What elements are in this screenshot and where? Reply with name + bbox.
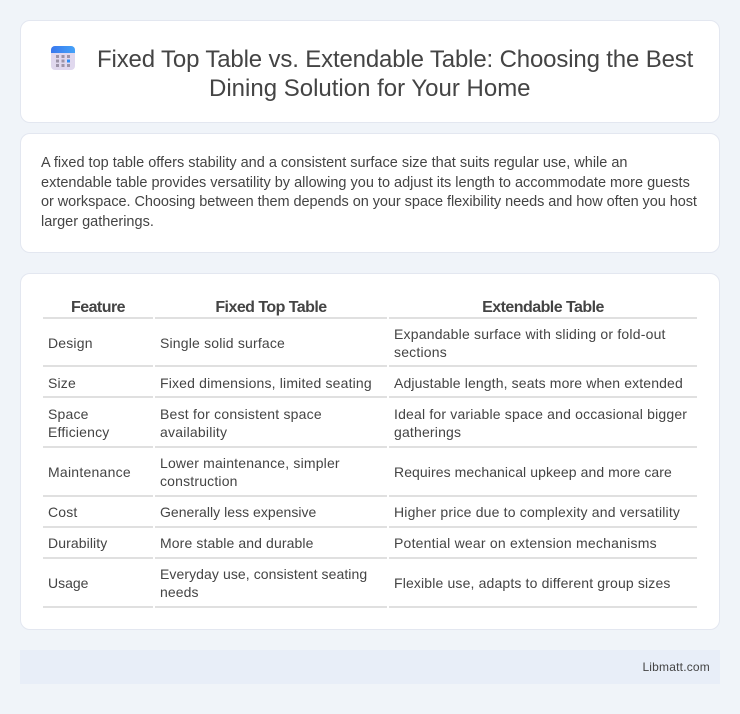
comparison table: Ideal for variable space and occasional bigger xyxy=(394,406,687,422)
title: Fixed Top Table vs. Extendable Table: Choosing the Best xyxy=(97,46,693,73)
intro text: larger gatherings. xyxy=(41,214,154,230)
comparison table: Generally less expensive xyxy=(160,504,316,520)
header: fixed top table: Fixed Top Table xyxy=(215,299,327,316)
comparison table: Single solid surface xyxy=(160,335,285,351)
intro text xyxy=(41,155,697,230)
header: extendable table xyxy=(389,298,697,319)
row: space efficiency xyxy=(48,406,110,440)
comparison table: Expandable surface with sliding or fold-out xyxy=(394,326,666,342)
comparison table: Fixed dimensions, limited seating xyxy=(160,375,372,391)
comparison table: Potential wear on extension mechanisms xyxy=(394,535,657,551)
footer credit: Libmatt.com xyxy=(642,660,710,674)
intro text: A fixed top table offers stability and a consistent surface size that suits regular use, while an xyxy=(41,155,628,171)
row: cost: Cost xyxy=(48,504,78,520)
row: usage: Usage xyxy=(48,575,88,591)
comparison table: Higher price due to complexity and versatility xyxy=(394,504,680,520)
header: fixed top table xyxy=(155,298,387,319)
title: Dining Solution for Your Home xyxy=(209,75,531,102)
row: durability: Durability xyxy=(48,535,107,551)
comparison table: More stable and durable xyxy=(160,535,314,551)
row: maintenance: Maintenance xyxy=(48,464,131,480)
icon: calendar grid xyxy=(51,46,75,70)
comparison table: Best for consistent space xyxy=(160,406,322,422)
comparison table xyxy=(43,299,697,608)
comparison table: Requires mechanical upkeep and more care xyxy=(394,464,672,480)
comparison table: construction xyxy=(160,473,238,489)
row: space efficiency: Space xyxy=(48,406,89,422)
row: size: Size xyxy=(48,375,76,391)
intro text: or workspace. Choosing between them depends on your space flexibility needs and how often you host xyxy=(41,194,697,210)
comparison table: Adjustable length, seats more when extended xyxy=(394,375,683,391)
comparison table: sections xyxy=(394,344,447,360)
row: design: Design xyxy=(48,335,93,351)
comparison table: gatherings xyxy=(394,424,461,440)
footer bar xyxy=(20,650,720,684)
panel: introduction xyxy=(20,133,720,253)
comparison table: availability xyxy=(160,424,227,440)
header: feature xyxy=(43,298,153,319)
header: feature: Feature xyxy=(71,299,125,316)
comparison table: needs xyxy=(160,584,199,600)
comparison table: Everyday use, consistent seating xyxy=(160,566,367,582)
comparison table: Flexible use, adapts to different group sizes xyxy=(394,575,671,591)
row: space efficiency: Efficiency xyxy=(48,424,109,440)
comparison table: Lower maintenance, simpler xyxy=(160,455,340,471)
title xyxy=(97,46,694,102)
panel: title card xyxy=(20,20,720,123)
header: extendable table: Extendable Table xyxy=(482,299,604,316)
panel: comparison table xyxy=(20,273,720,630)
intro text: extendable table provides versatility by allowing you to adjust its length to accommodate more guests xyxy=(41,174,690,190)
